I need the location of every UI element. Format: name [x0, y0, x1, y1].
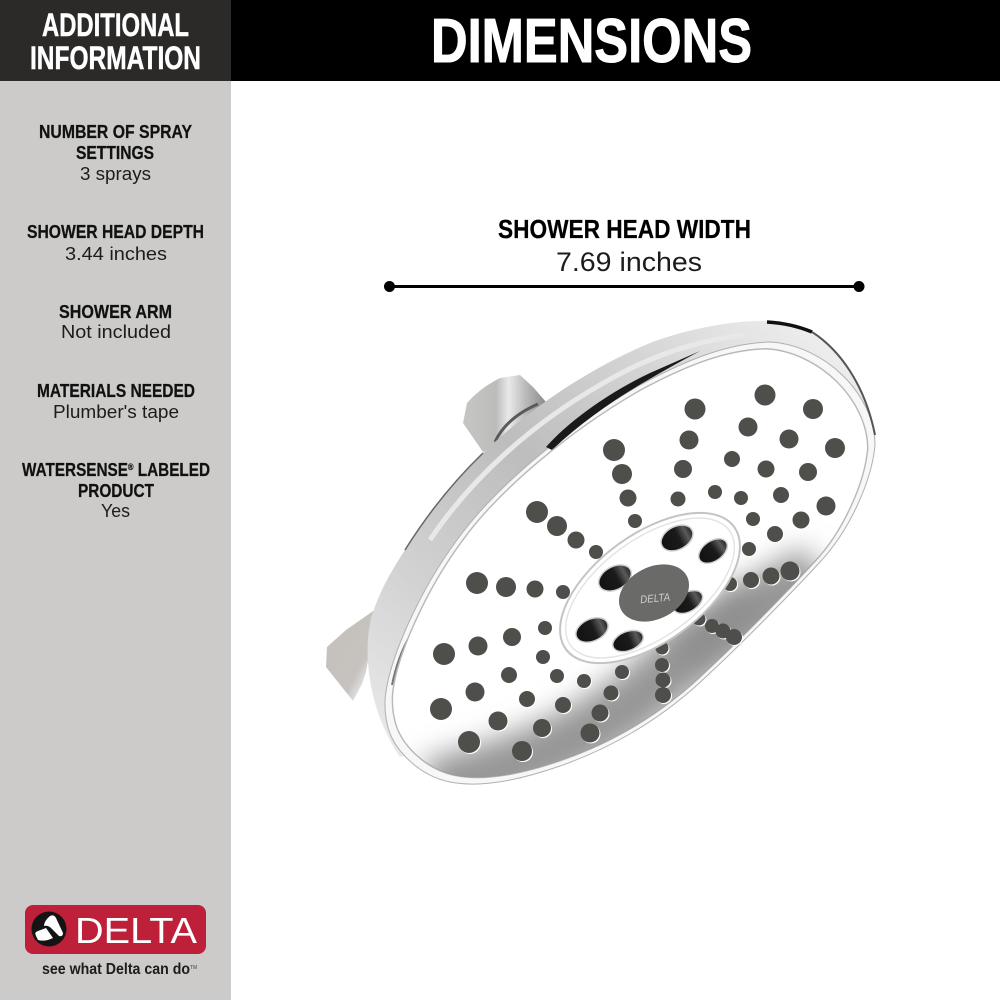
- title: dimensions: DIMENSIONS: [431, 7, 752, 76]
- wedge bracket: [326, 609, 376, 701]
- face outer rim: [385, 342, 875, 784]
- face: [392, 349, 868, 778]
- logo: Delta: TM: [190, 965, 197, 971]
- top edge highlight: [767, 322, 875, 435]
- sidebar item: shower arm: SHOWER ARM: [59, 302, 172, 322]
- shower head illustration: [326, 321, 875, 790]
- hub spray holes: [572, 520, 732, 656]
- header bar: additional information: [0, 0, 231, 81]
- hub badge: [609, 553, 699, 633]
- width label: 7.69 inches: [556, 247, 702, 277]
- sidebar item: shower head depth: [27, 222, 204, 264]
- neck connector: [463, 375, 546, 452]
- sidebar item: materials needed: Plumber's tape: [53, 402, 179, 422]
- title: dimensions: [231, 0, 1000, 81]
- sidebar item: watersense labeled product: Yes: [101, 501, 130, 521]
- width label: [498, 214, 751, 277]
- sidebar item: watersense labeled product: ®: [128, 462, 134, 472]
- sidebar item: number of spray settings: 3 sprays: [80, 164, 151, 184]
- rim band stripes: [430, 335, 745, 540]
- sidebar item: number of spray settings: [39, 122, 192, 184]
- logo: Delta: [25, 905, 206, 978]
- hub badge: DELTA: [640, 592, 671, 606]
- center hub: [534, 483, 766, 693]
- sidebar item: shower head depth: 3.44 inches: [65, 244, 167, 264]
- sidebar item: materials needed: [37, 381, 195, 422]
- left rim shadow: [392, 632, 412, 685]
- sidebar item: watersense labeled product: PRODUCT: [78, 481, 154, 501]
- logo: Delta: DELTA: [75, 910, 197, 951]
- sidebar item: watersense labeled product: [22, 460, 210, 521]
- logo: Delta: see what Delta can do: [42, 961, 190, 978]
- face reflections: [430, 575, 820, 790]
- sidebar item: number of spray settings: SETTINGS: [76, 143, 154, 163]
- body ring: [368, 321, 875, 757]
- sidebar item: shower arm: [59, 302, 172, 342]
- sidebar item: shower arm: Not included: [61, 322, 171, 342]
- sidebar item: watersense labeled product: WATERSENSE: [22, 460, 147, 480]
- panel: additional information sidebar: [0, 81, 231, 1000]
- rim dark band: [546, 351, 700, 450]
- nozzles: [430, 384, 845, 761]
- sidebar item: watersense labeled product: LABELED: [134, 460, 210, 480]
- arrow: width dimension line: [384, 281, 864, 292]
- width label: SHOWER HEAD WIDTH: [498, 214, 751, 244]
- sidebar item: materials needed: MATERIALS NEEDED: [37, 381, 195, 401]
- header bar: additional information: INFORMATION: [30, 40, 201, 76]
- sidebar item: number of spray settings: NUMBER OF SPRAY: [39, 122, 192, 142]
- body outline upper left: [405, 453, 483, 550]
- header bar: additional information: ADDITIONAL: [42, 7, 189, 43]
- icon: Delta triangle mark: [32, 912, 66, 946]
- sidebar item: shower head depth: SHOWER HEAD DEPTH: [27, 222, 204, 242]
